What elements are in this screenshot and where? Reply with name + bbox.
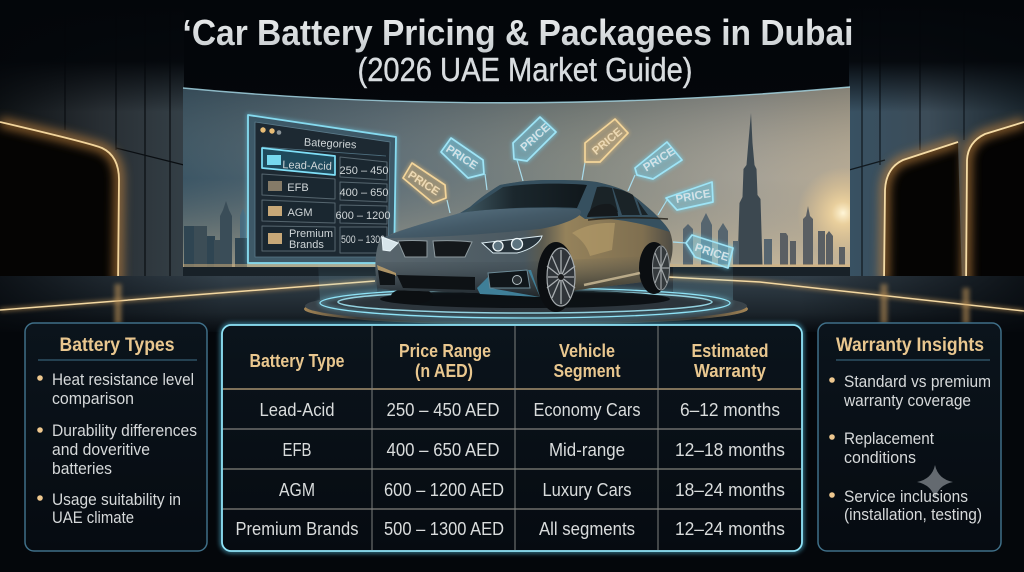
price tag 7 [686, 235, 733, 268]
bullet 2: and doveritive [52, 440, 150, 459]
bullet 3: (installation, testing) [844, 505, 982, 524]
row: EFB: EFB [282, 440, 312, 460]
row: Lead-Acid: Lead-Acid [260, 400, 334, 420]
heading: Battery Types [60, 334, 175, 356]
header row: Vehicle [559, 340, 615, 361]
top fade [0, 0, 1024, 112]
bullet 1: warranty coverage [843, 391, 971, 410]
bullet 2: conditions [844, 448, 916, 467]
row: EFB: Mid-range [549, 440, 625, 460]
window ledge [183, 267, 850, 277]
left bumper reflection [377, 265, 396, 276]
price tag 3 [513, 117, 556, 161]
row: Premium Brands [262, 226, 335, 251]
price tag 2 [441, 138, 484, 178]
price cells: 500 – 1300 [341, 234, 385, 246]
lit door outlines [884, 122, 1024, 288]
headlight right [482, 236, 542, 253]
bullet 3 [829, 487, 982, 524]
row: EFB: 400 – 650 AED [386, 440, 500, 460]
price tag 4: PRICE [590, 126, 625, 158]
row: EFB [282, 440, 785, 460]
row: Lead-Acid [260, 400, 780, 420]
header row [250, 340, 768, 381]
title [182, 12, 854, 88]
row: Premium Brands: Premium [289, 228, 333, 240]
bullet 3 [37, 490, 181, 527]
price tag 2: PRICE [443, 143, 480, 173]
row: Lead-Acid: Economy Cars [534, 400, 640, 420]
near front wheel dark [391, 288, 433, 304]
lower intake [397, 275, 475, 290]
row: AGM: 18–24 months [675, 480, 785, 500]
window dots [260, 127, 281, 135]
bullet 1: Heat resistance level [52, 370, 194, 389]
price tag 5: PRICE [641, 145, 678, 174]
lower body shade [376, 255, 672, 297]
headlight left [382, 237, 398, 251]
price tag 1: PRICE [405, 169, 442, 199]
hood [384, 208, 581, 238]
row: EFB: EFB [287, 182, 309, 194]
row: Premium Brands: All segments [539, 519, 635, 539]
skyline: left towers [184, 201, 247, 268]
car body [375, 180, 673, 297]
display platform [304, 288, 748, 325]
rear wheel [639, 242, 670, 294]
character line [588, 218, 668, 220]
bullet 1: comparison [52, 389, 134, 408]
header row: Warranty [694, 360, 767, 381]
bullet 2 [829, 429, 934, 467]
panel: Warranty Insights [818, 323, 1001, 551]
price cells: 400 – 650 [340, 187, 388, 199]
row: AGM: 600 – 1200 AED [384, 480, 504, 500]
header row: Estimated [692, 340, 768, 361]
car shadow [380, 290, 670, 308]
lit door outline [0, 122, 119, 284]
front wheel [537, 242, 575, 312]
row: AGM [279, 480, 785, 500]
car [375, 180, 673, 312]
roof and pillars [460, 180, 670, 232]
row: Lead-Acid: Lead-Acid [282, 159, 332, 173]
header row: Price Range [399, 340, 491, 361]
categories holographic panel [248, 115, 396, 263]
header row: Battery Type [250, 350, 344, 371]
header row: Segment [554, 360, 620, 381]
row: EFB: 12–18 months [675, 440, 785, 460]
tag connectors [447, 160, 686, 243]
windshield [465, 184, 587, 212]
price tag 7: PRICE [693, 242, 731, 264]
left wall with lit doorway [0, 0, 184, 285]
row: Premium Brands [236, 519, 785, 539]
bullet 3: UAE climate [52, 508, 134, 527]
price tags [403, 117, 733, 268]
row: Premium Brands: 500 – 1300 AED [384, 519, 504, 539]
row: EFB [262, 174, 335, 199]
row: AGM: AGM [279, 480, 315, 500]
pricing table [222, 325, 802, 551]
row: AGM: AGM [287, 207, 313, 219]
bullet 3: Usage suitability in [52, 490, 181, 509]
row: Premium Brands: Brands [289, 239, 324, 251]
floor [0, 276, 1024, 332]
price cells: 600 – 1200 [335, 210, 391, 222]
row: AGM: Luxury Cars [542, 480, 632, 500]
price tag 1 [403, 163, 446, 203]
teal bumper accent [477, 270, 540, 297]
left intake [378, 270, 395, 285]
side windows [588, 187, 648, 217]
bullet 2: Replacement [844, 429, 934, 448]
price tag 3: PRICE [519, 121, 553, 154]
price tag 5 [635, 142, 682, 179]
price tag 6 [666, 182, 713, 210]
holographic beams [318, 262, 733, 300]
price tag 4 [585, 119, 628, 162]
bullet 2: batteries [52, 459, 112, 478]
table glow [222, 325, 802, 551]
skyline: Burj Khalifa and right towers [183, 113, 850, 267]
sill highlight [584, 273, 640, 285]
row: Premium Brands: Premium Brands [236, 519, 358, 539]
icon: sparkle [917, 465, 953, 499]
divider [836, 359, 990, 361]
bullet 2 [37, 421, 197, 478]
grille right [433, 241, 472, 257]
door highlight [572, 223, 615, 256]
row: Lead-Acid [262, 148, 335, 175]
window: sky view [183, 87, 889, 270]
row: Lead-Acid: 250 – 450 AED [386, 400, 500, 420]
panel: Battery Types [25, 323, 207, 551]
bullet 1 [37, 370, 194, 408]
side intake and fog light [488, 270, 530, 288]
bullet 1 [829, 372, 991, 410]
price cells [335, 157, 391, 253]
bullet 3: Service inclusions [844, 487, 968, 506]
panel heading: Bategories [304, 137, 357, 151]
mirror [587, 204, 618, 217]
row lines [223, 388, 801, 390]
right wall with lit doorways [849, 0, 1024, 288]
price cells: 250 – 450 [340, 165, 388, 177]
bullet 1: Standard vs premium [844, 372, 991, 391]
row: Premium Brands: 12–24 months [675, 519, 785, 539]
title: ‘Car Battery Pricing & Packagees in Dubai [182, 12, 854, 53]
window frame glow [183, 87, 850, 103]
row: Lead-Acid: 6–12 months [680, 400, 780, 420]
grille left [398, 240, 427, 257]
header row: (n AED) [415, 360, 473, 381]
row: AGM [262, 200, 335, 223]
price tag 6: PRICE [675, 188, 712, 206]
subtitle: (2026 UAE Market Guide) [358, 51, 692, 88]
heading: Warranty Insights [836, 334, 984, 356]
divider [38, 359, 197, 361]
icon: setting sun [802, 173, 850, 252]
bullet 2: Durability differences [52, 421, 197, 440]
